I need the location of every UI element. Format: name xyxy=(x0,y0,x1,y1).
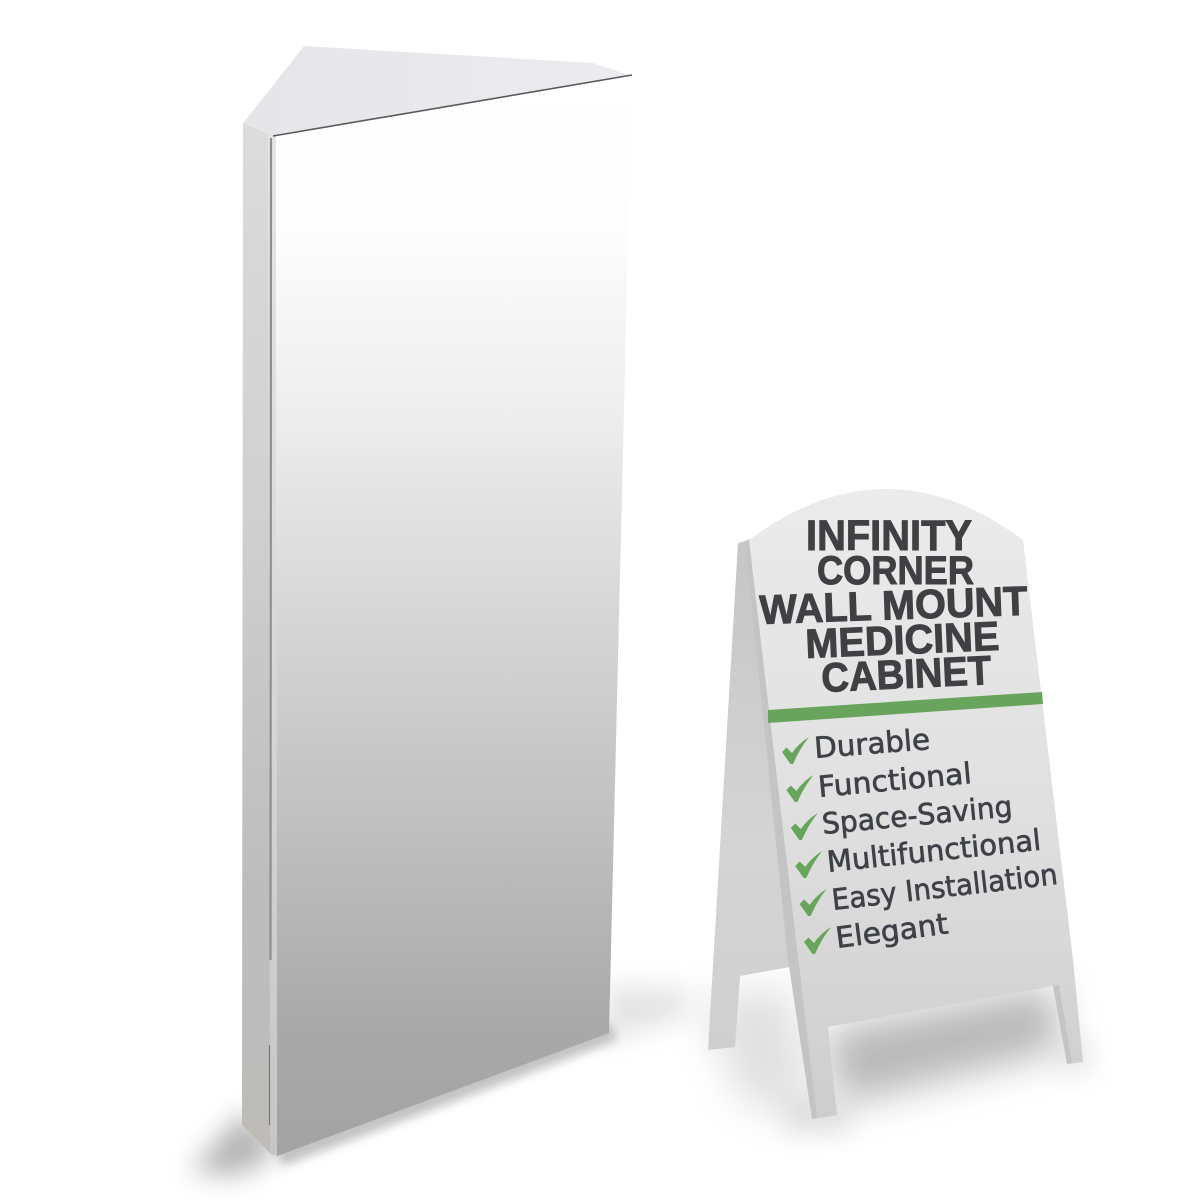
label: Elegant: Elegant xyxy=(833,906,950,955)
label: Space-Saving: Space-Saving xyxy=(820,789,1014,841)
cabinet top face xyxy=(244,46,632,136)
cabinet left side panel xyxy=(242,122,273,1156)
corner medicine cabinet xyxy=(242,46,632,1156)
check: Functional xyxy=(786,775,813,802)
sign heading: CABINET xyxy=(820,647,992,701)
label: Easy Installation: Easy Installation xyxy=(830,857,1059,917)
A-frame sign xyxy=(708,489,1083,1119)
sign heading: MEDICINE xyxy=(804,613,1000,667)
sign heading: CORNER xyxy=(817,549,974,593)
sign heading: INFINITY xyxy=(806,512,972,560)
sign heading xyxy=(759,512,1028,701)
sign heading: WALL MOUNT xyxy=(759,578,1028,633)
sign front face xyxy=(749,489,1083,1118)
check: Durable xyxy=(782,737,809,764)
label: Functional: Functional xyxy=(817,756,973,804)
check: Multifunctional xyxy=(795,851,822,878)
check: Space-Saving xyxy=(791,813,818,840)
feature list xyxy=(782,722,1059,955)
sign left edge xyxy=(745,539,837,1119)
top seam xyxy=(273,75,632,136)
check: Easy Installation xyxy=(800,889,827,916)
floor shadows xyxy=(190,985,1095,1175)
cabinet door edge xyxy=(268,134,277,1156)
right leg edge xyxy=(1053,985,1072,1064)
label: Multifunctional: Multifunctional xyxy=(825,823,1043,879)
label: Durable: Durable xyxy=(813,722,931,765)
mirror door xyxy=(276,76,632,1156)
green divider bar xyxy=(768,692,1043,723)
check: Elegant xyxy=(804,927,831,954)
sign back frame xyxy=(708,540,790,1050)
